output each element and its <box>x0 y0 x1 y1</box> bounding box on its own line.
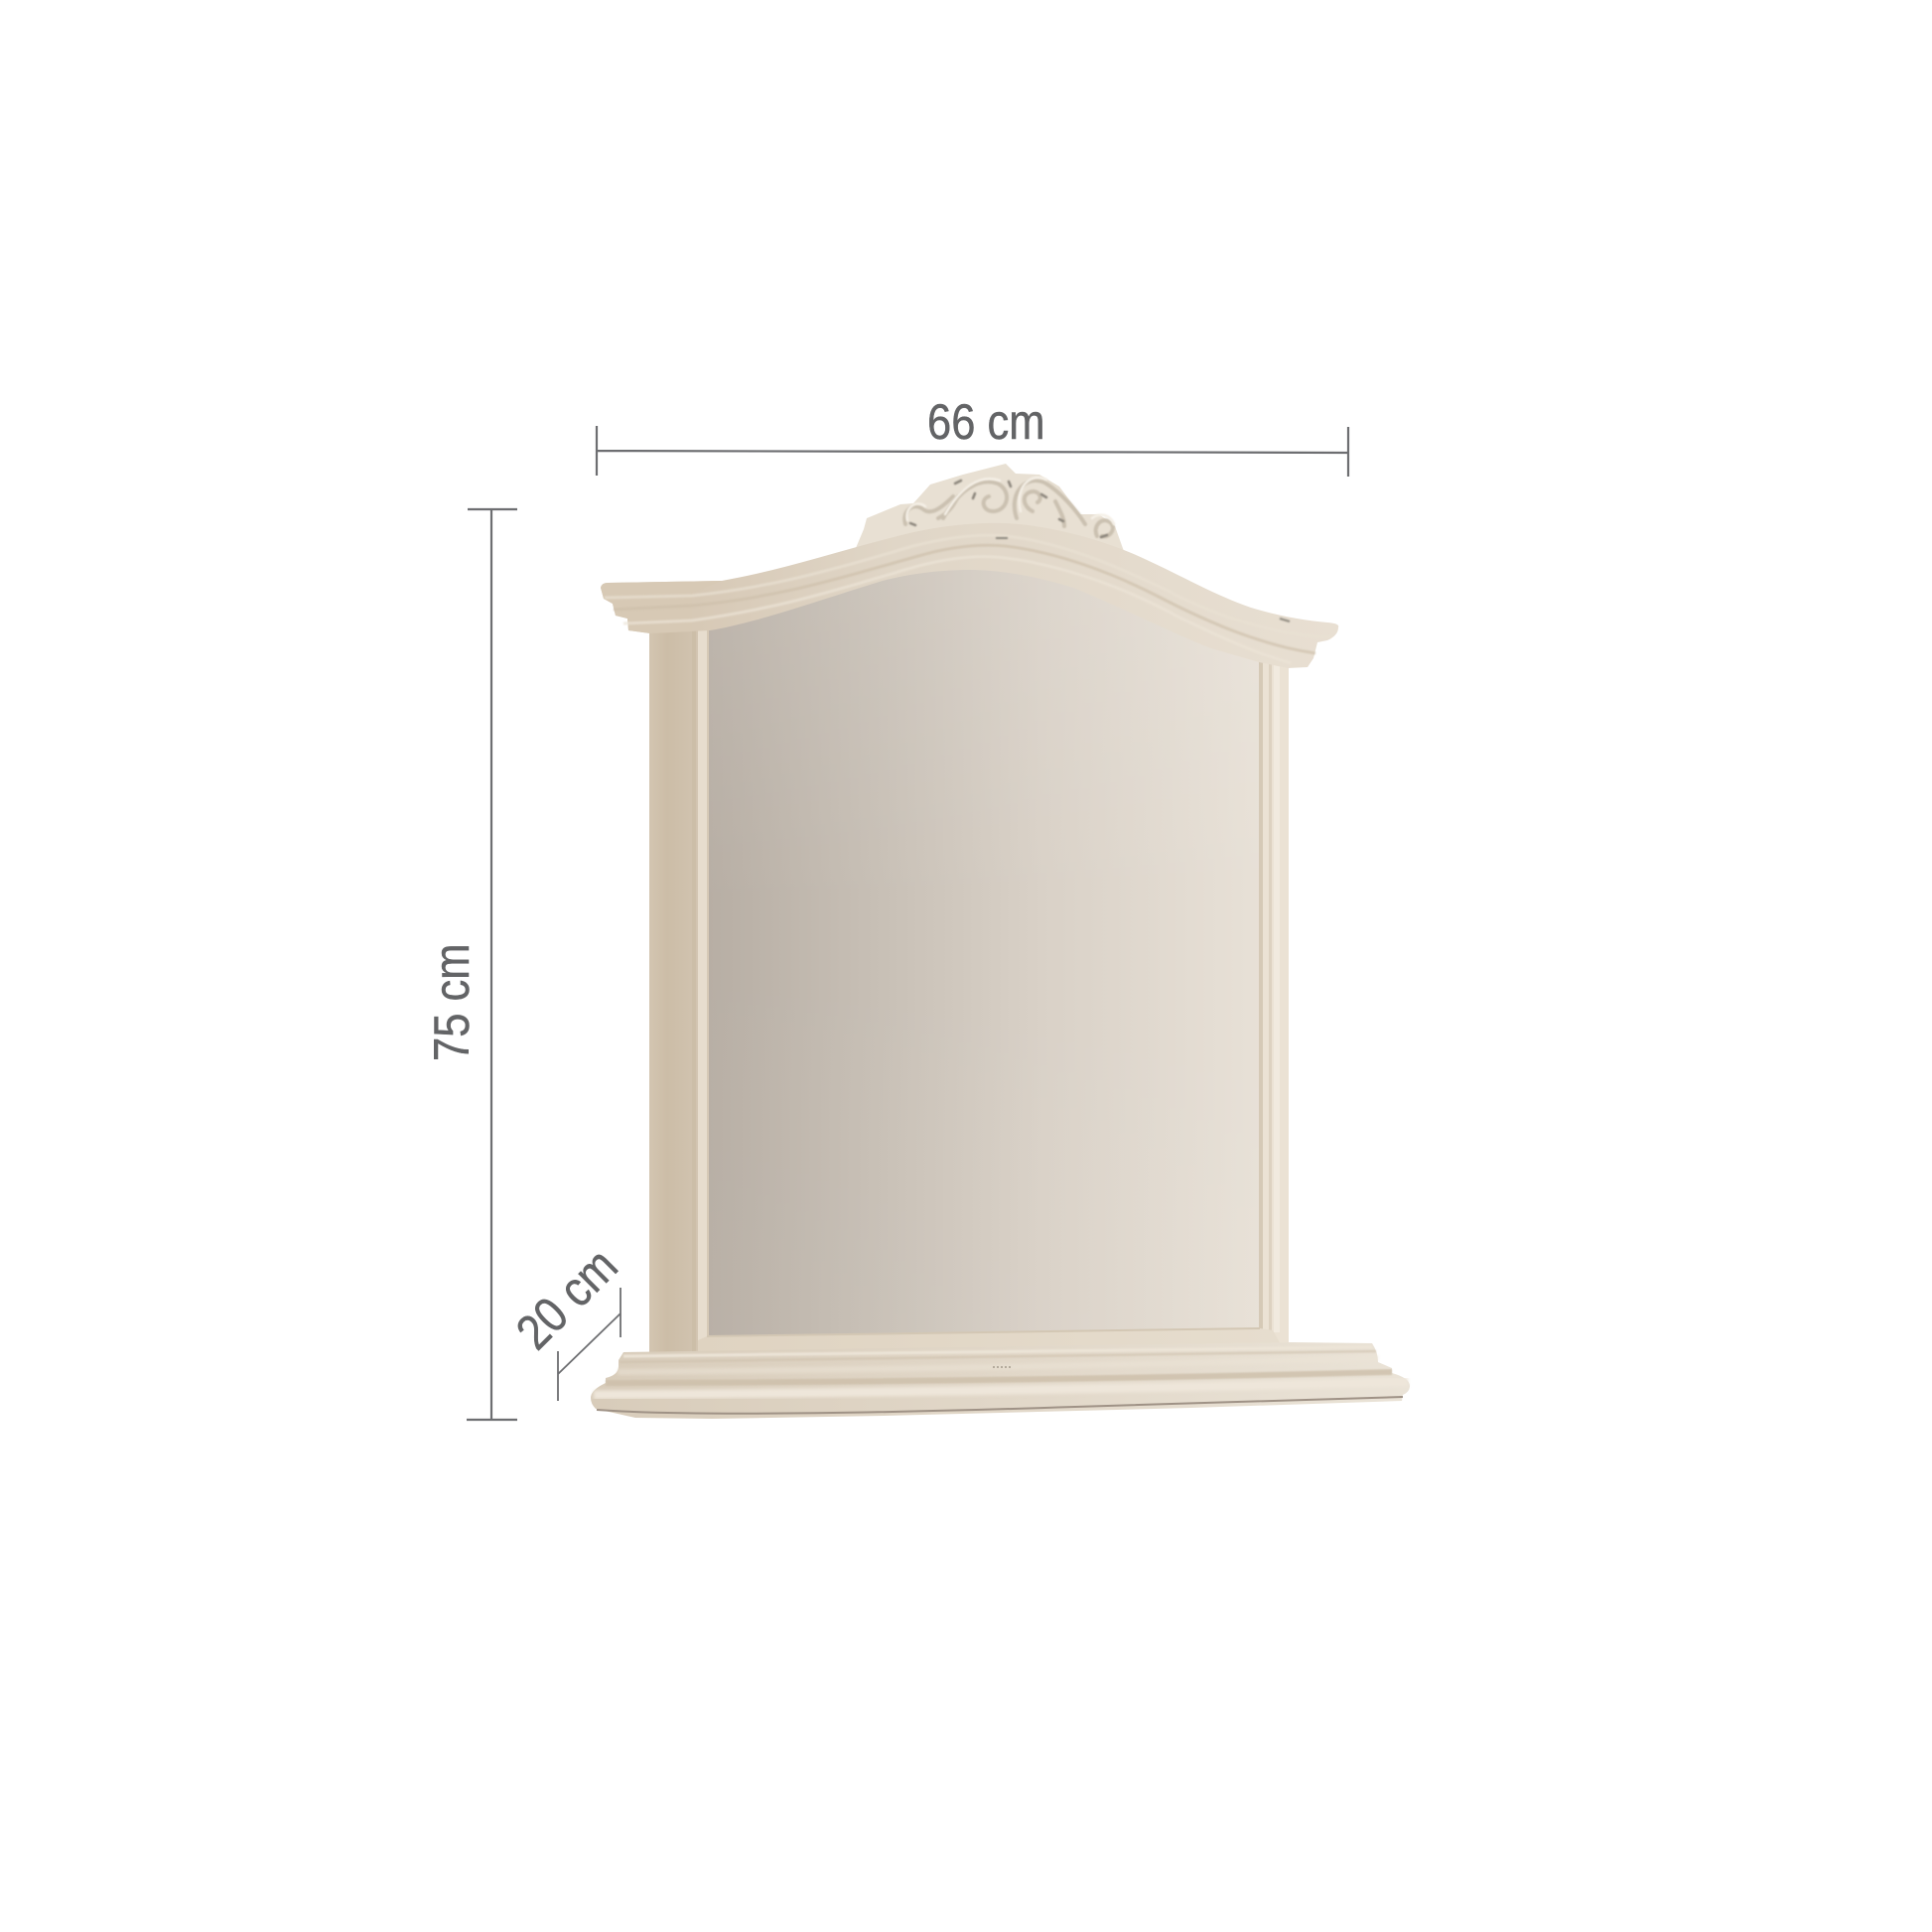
cornice top moulding <box>601 523 1338 668</box>
dimension: height 75 cm <box>424 509 517 1420</box>
left post <box>649 625 709 1354</box>
crest carving <box>856 464 1125 554</box>
label: 75 cm: 75 cm <box>424 944 480 1061</box>
label: 20 cm: 20 cm <box>505 1238 627 1360</box>
base plinth <box>591 1342 1410 1419</box>
bottom sill of frame <box>698 1328 1281 1354</box>
crest scrollwork <box>904 478 1114 537</box>
dimension: depth 20 cm <box>505 1238 627 1401</box>
label: 66 cm: 66 cm <box>927 394 1044 450</box>
mirror glass <box>707 561 1265 1338</box>
dimension: width 66 cm <box>597 394 1348 477</box>
right post <box>1259 657 1289 1344</box>
